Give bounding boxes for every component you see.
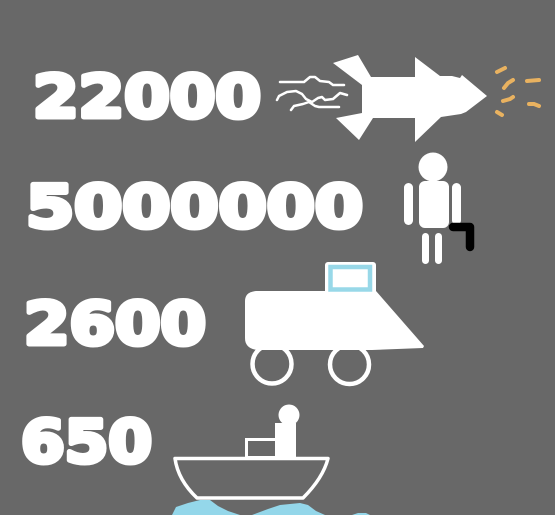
waves [172,500,370,515]
rocket exhaust lines [277,77,347,110]
person leg right [435,233,442,264]
person leg left [422,233,429,264]
boat funnel [275,423,296,458]
number: 22000: 22000 [33,62,261,131]
number: 2600: 2600 [24,289,206,358]
rocket sparks [497,68,539,115]
boat cabin [246,440,276,458]
vehicle body [245,291,424,350]
icon: boat on waves [172,404,370,515]
icon: person with black hook [404,152,470,264]
person head [418,152,448,182]
rocket body [333,55,487,142]
icon: vehicle [245,262,424,384]
icon: rocket [277,55,539,142]
number: 5000000: 5000000 [26,172,363,241]
boat hull [175,458,328,498]
person arm right [452,183,461,225]
person torso [419,181,449,228]
person arm left [404,183,413,225]
boat smoke [278,404,300,426]
vehicle window [330,267,370,290]
black hook [453,227,470,247]
number: 650: 650 [21,407,152,476]
vehicle cabin [325,262,376,294]
vehicle wheels [252,344,369,384]
